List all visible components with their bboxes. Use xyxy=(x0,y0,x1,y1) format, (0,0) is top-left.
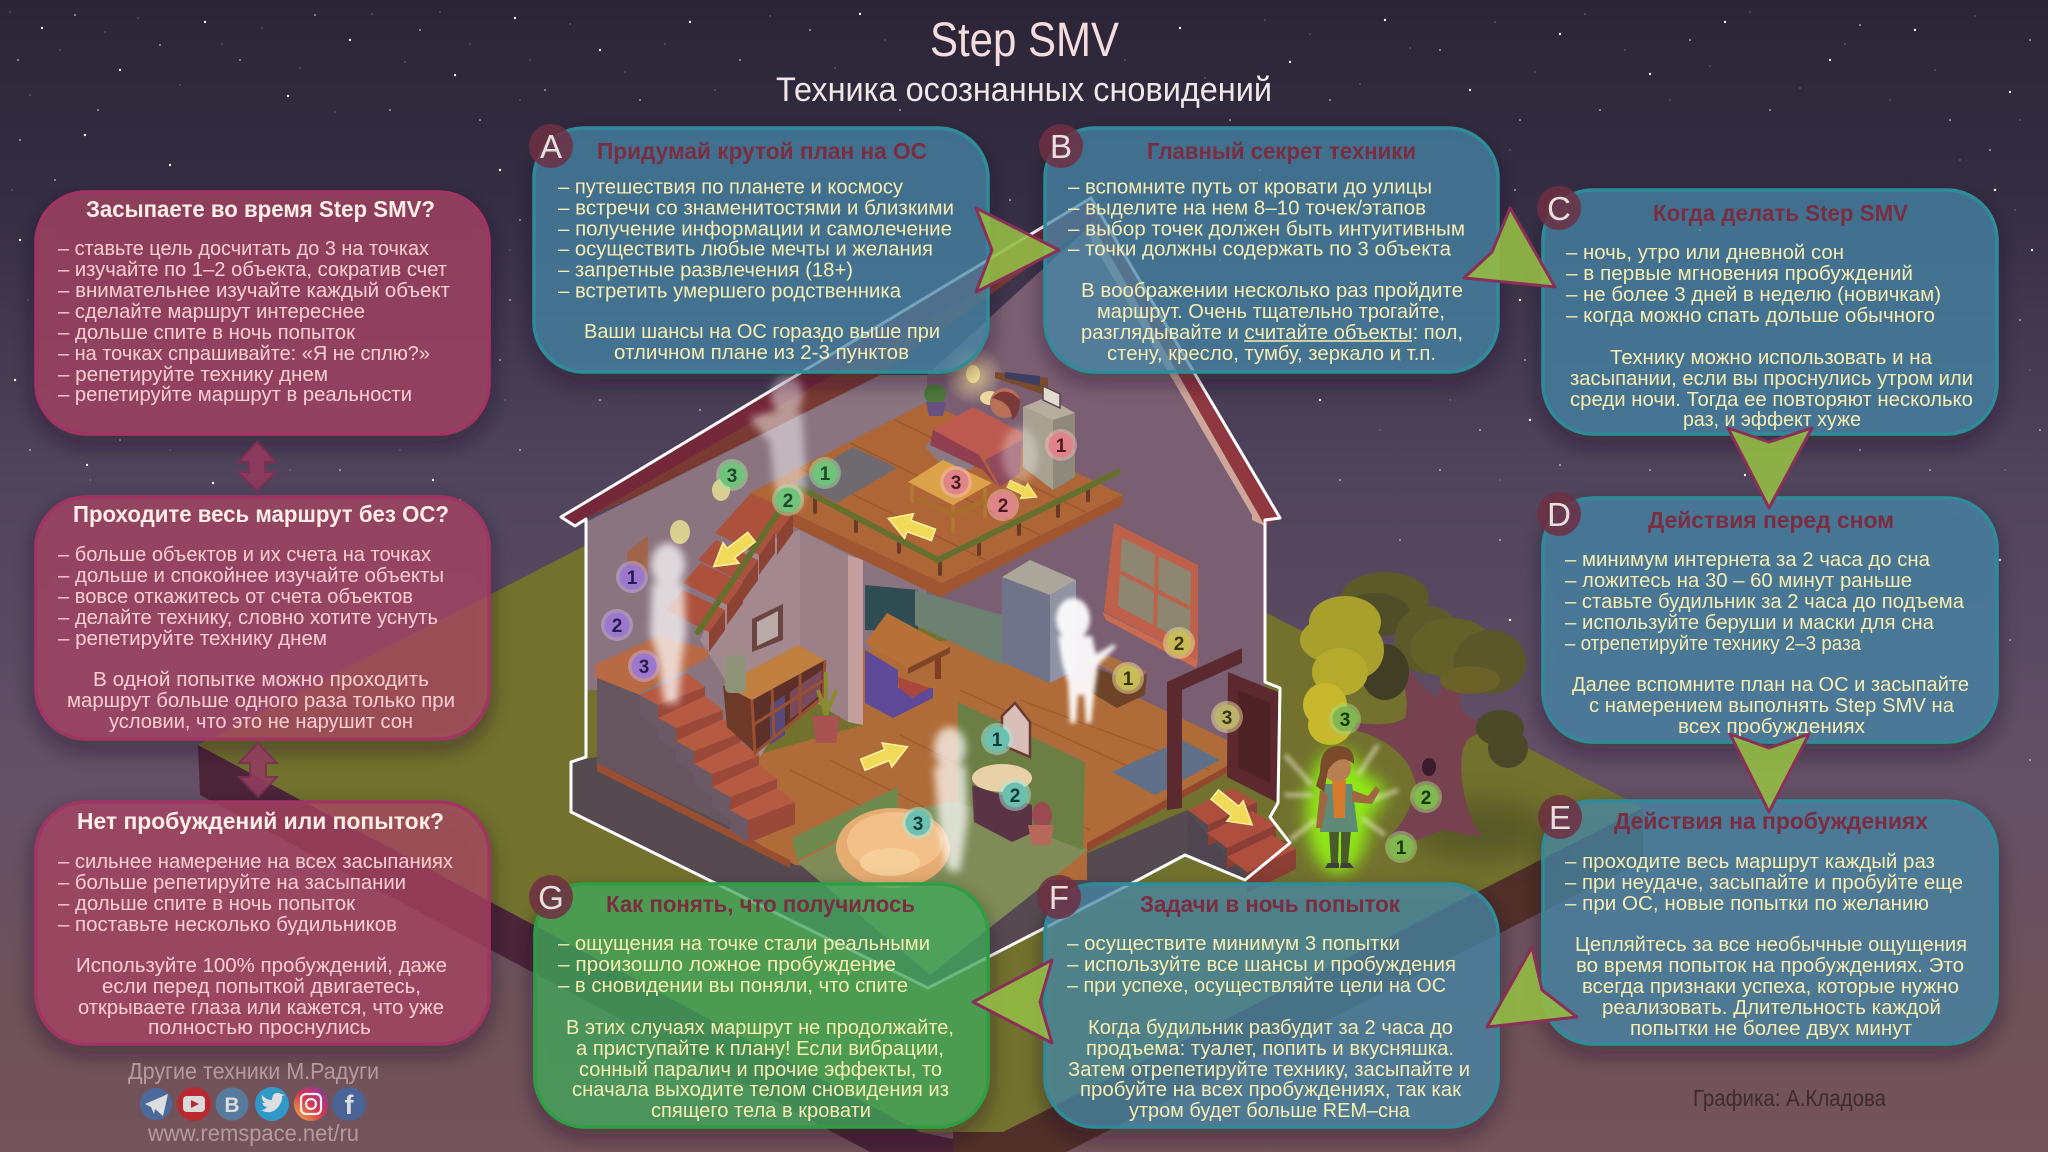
ghost on bed xyxy=(1002,427,1038,483)
right roof xyxy=(1091,198,1280,526)
dark foliage xyxy=(1339,572,1528,768)
badge E xyxy=(1538,795,1582,839)
list: – репетируйте технику днем xyxy=(58,627,327,650)
window xyxy=(1102,523,1198,668)
route points: bedroom (pink) xyxy=(940,429,1077,521)
list: – на точках спрашивайте: «Я не сплю?» xyxy=(58,342,430,365)
jacket xyxy=(1320,784,1358,832)
heading: Действия на пробуждениях xyxy=(1614,808,1928,834)
panel C: when to do xyxy=(1537,186,1997,434)
route points: bedroom (pink): 1 xyxy=(1056,436,1067,457)
list: – не более 3 дней в неделю (новичкам) xyxy=(1566,283,1941,306)
list: – при успехе, осуществляйте цели на ОС xyxy=(1067,974,1446,997)
graphics credit: Графика: А.Кладова xyxy=(1693,1085,1886,1111)
list: – осуществить любые мечты и желания xyxy=(558,238,933,260)
list: – произошло ложное пробуждение xyxy=(558,953,896,976)
note: среди ночи. Тогда ее повторяют несколько xyxy=(1570,388,1973,411)
note xyxy=(1081,279,1463,365)
attic lamp xyxy=(943,345,1003,405)
panel: going through the route without lucid dream xyxy=(36,497,489,739)
panel box xyxy=(534,128,988,372)
list: – больше репетируйте на засыпании xyxy=(58,871,406,894)
panel A: plan xyxy=(529,124,988,372)
route points: stairs (purple): 1 xyxy=(627,568,638,589)
list: – в первые мгновения пробуждений xyxy=(1566,262,1913,285)
list: – в сновидении вы поняли, что спите xyxy=(558,974,908,997)
list: – при неудаче, засыпайте и пробуйте еще xyxy=(1565,871,1963,894)
panel box xyxy=(36,497,489,739)
icon: facebook xyxy=(332,1087,366,1121)
panel box xyxy=(1045,128,1498,372)
hair xyxy=(1316,746,1354,792)
list: – репетируйте маршрут в реальности xyxy=(58,383,412,406)
badge C xyxy=(1537,186,1581,230)
route points: hall (yellow): 1 xyxy=(1123,669,1134,690)
note: В одной попытке можно проходить xyxy=(93,668,429,691)
panel box xyxy=(535,884,988,1127)
pot xyxy=(1028,802,1054,845)
note: если перед попыткой двигаетесь, xyxy=(102,975,421,998)
footer: website: www.remspace.net/ru xyxy=(147,1120,359,1146)
list xyxy=(58,543,444,650)
list: – дольше и спокойнее изучайте объекты xyxy=(58,564,444,587)
tree route points: 2 xyxy=(1421,788,1431,809)
route points: stairs (purple): 3 xyxy=(639,657,649,678)
ghost in kitchen xyxy=(1056,598,1116,723)
list: – используйте все шансы и пробуждения xyxy=(1067,953,1456,976)
left roof xyxy=(561,198,1091,527)
arrow E to F xyxy=(1487,947,1577,1027)
panel G: how to know it worked xyxy=(529,875,988,1127)
badge F xyxy=(1037,875,1081,919)
list: – сильнее намерение на всех засыпаниях xyxy=(58,850,454,873)
ground floor wood xyxy=(752,640,1227,880)
grass top xyxy=(198,403,1643,1132)
tall shelf xyxy=(1023,386,1075,490)
badge B: B xyxy=(1050,128,1072,165)
route points: bathroom (teal): 3 xyxy=(913,814,923,835)
badge G: G xyxy=(538,879,564,916)
list: – ночь, утро или дневной сон xyxy=(1566,241,1844,264)
house base xyxy=(571,757,1290,988)
kitchen table xyxy=(865,613,950,679)
list: – получение информации и самолечение xyxy=(558,218,952,240)
shoe rack xyxy=(1090,655,1147,708)
soil left side xyxy=(198,745,957,1152)
ground island xyxy=(198,403,1643,1152)
hoodie xyxy=(1332,780,1346,818)
glow xyxy=(1306,750,1384,874)
list: – минимум интернета за 2 часа до сна xyxy=(1565,548,1931,571)
bedside table xyxy=(908,460,992,533)
mirror xyxy=(1002,703,1030,757)
tree xyxy=(1300,572,1528,863)
left wall xyxy=(586,375,927,757)
yellow foliage xyxy=(1300,596,1384,745)
sofa xyxy=(865,650,933,718)
heading: Главный секрет техники xyxy=(1147,138,1416,164)
route points: hall (yellow) xyxy=(1112,627,1243,733)
note: засыпании, если вы проснулись утром или xyxy=(1570,367,1973,390)
note: открываете глаза или кажется, что уже xyxy=(78,996,444,1019)
rug xyxy=(1112,740,1220,795)
platform planks xyxy=(800,420,1085,560)
bathroom xyxy=(792,702,1088,975)
note: во время попыток на пробуждениях. Это xyxy=(1576,954,1964,977)
door frame xyxy=(1167,648,1242,810)
note: Далее вспомните план на ОС и засыпайте xyxy=(1572,673,1969,696)
note: продъема: туалет, попить и вкусняшка. xyxy=(1086,1037,1454,1060)
door xyxy=(1227,672,1278,803)
list: – дольше спите в ночь попыток xyxy=(58,892,356,915)
arms xyxy=(1316,786,1380,828)
arrow C to D xyxy=(1728,428,1812,508)
list: – изучайте по 1–2 объекта, сократив счет xyxy=(58,258,448,281)
note xyxy=(1572,673,1969,738)
list: – запретные развлечения (18+) xyxy=(558,258,853,282)
heading: Придумай крутой план на ОС xyxy=(597,138,927,164)
tree route points: 1 xyxy=(1396,838,1407,859)
roof timber line xyxy=(600,240,1060,502)
note: Затем отрепетируйте технику, засыпайте и xyxy=(1068,1058,1470,1081)
note: разглядывайте и считайте объекты: пол, xyxy=(1081,321,1463,344)
panel box xyxy=(1543,801,1997,1044)
heading: Действия перед сном xyxy=(1648,507,1894,533)
under-roof timber band xyxy=(586,225,1091,518)
list: – используйте беруши и маски для сна xyxy=(1565,611,1935,634)
tree route points: 3 xyxy=(1340,710,1350,731)
icon: vk: В xyxy=(224,1094,240,1117)
note xyxy=(1570,346,1973,431)
list: – встречи со знаменитостями и близкими xyxy=(558,196,954,220)
note: спящего тела в кровати xyxy=(651,1099,871,1122)
note: Когда будильник разбудит за 2 часа до xyxy=(1088,1016,1453,1039)
note xyxy=(76,954,447,1039)
list: – ощущения на точке стали реальными xyxy=(558,932,930,955)
note: условии, что это не нарушит сон xyxy=(109,710,413,733)
ghost on upper floor xyxy=(750,375,806,507)
note: стену, кресло, тумбу, зеркало и т.п. xyxy=(1107,342,1436,365)
note: Технику можно использовать и на xyxy=(1610,346,1933,369)
panel E: actions on awakenings xyxy=(1538,795,1997,1044)
note: Используйте 100% пробуждений, даже xyxy=(76,954,447,977)
note: а приступайте к плану! Если вибрации, xyxy=(576,1037,944,1060)
list: – ставьте будильник за 2 часа до подъема xyxy=(1565,590,1965,613)
route points: bedroom (pink): 3 xyxy=(951,473,961,494)
note: раз, и эффект хуже xyxy=(1683,408,1861,431)
note xyxy=(584,320,940,364)
note: пробуйте на всех пробуждениях, так как xyxy=(1080,1078,1462,1101)
note xyxy=(566,1016,954,1122)
heading: Проходите весь маршрут без ОС? xyxy=(73,501,449,527)
route points: bathroom (teal): 2 xyxy=(1010,786,1020,807)
note: полностью проснулись xyxy=(148,1016,371,1039)
right wall xyxy=(927,225,1265,770)
note: В воображении несколько раз пройдите xyxy=(1081,279,1463,302)
route points: hall (yellow): 3 xyxy=(1222,708,1232,729)
list: – ставьте цель досчитать до 3 на точках xyxy=(58,237,430,260)
sink cabinet xyxy=(972,764,1032,842)
arrow D to E xyxy=(1730,734,1809,812)
note: Ваши шансы на ОС гораздо выше при xyxy=(584,320,940,343)
potted plant xyxy=(812,672,840,743)
list: – больше объектов и их счета на точках xyxy=(58,543,432,566)
floor planks xyxy=(790,690,1210,880)
character with green glow xyxy=(1285,745,1398,874)
list: – путешествия по планете и космосу xyxy=(558,176,904,198)
house cutaway illustration xyxy=(561,198,1296,988)
panel B: main secret xyxy=(1039,124,1498,372)
note: маршрут больше одного раза только при xyxy=(67,689,455,712)
arrow B to C xyxy=(1464,208,1555,287)
list xyxy=(58,237,451,406)
yellow route arrows xyxy=(706,476,1260,835)
under-stair wall xyxy=(597,678,752,838)
arrow F to G xyxy=(973,960,1052,1043)
attic rug xyxy=(795,447,897,503)
route points: attic landing (green): 1 xyxy=(820,464,831,485)
tree route points xyxy=(1329,703,1442,863)
list: – встретить умершего родственника xyxy=(558,280,902,302)
list: – сделайте маршрут интереснее xyxy=(58,300,365,323)
trunk xyxy=(1352,668,1484,840)
footer: other techniques: Другие техники М.Радуги xyxy=(128,1058,379,1084)
panel F: tasks on attempt night xyxy=(1037,875,1498,1127)
wall bookshelf xyxy=(995,372,1048,396)
badge B xyxy=(1039,124,1083,168)
house white outline xyxy=(561,198,1290,988)
badge F: F xyxy=(1049,879,1069,916)
head xyxy=(1323,754,1351,782)
badge A: A xyxy=(540,128,562,165)
route points: bathroom (teal): 1 xyxy=(992,730,1003,751)
note: всех пробуждениях xyxy=(1678,715,1866,738)
list: – проходите весь маршрут каждый раз xyxy=(1565,850,1935,873)
note: с намерением выполнять Step SMV на xyxy=(1589,694,1955,717)
wall beside stairs xyxy=(700,530,800,757)
note: Цепляйтесь за все необычные ощущения xyxy=(1575,933,1967,956)
lower stair flight xyxy=(640,673,795,843)
bathtub xyxy=(836,808,950,888)
list xyxy=(1565,850,1963,915)
note: сначала выходите телом сновидения из xyxy=(572,1078,949,1101)
soil right side xyxy=(953,808,1643,1152)
route points: hall (yellow): 2 xyxy=(1174,634,1184,655)
badge G xyxy=(529,875,573,919)
icon: vk xyxy=(216,1088,248,1120)
partition wall xyxy=(800,530,863,725)
small wall picture xyxy=(627,535,648,590)
route points: attic landing (green): 3 xyxy=(727,466,737,487)
tree shadow on grass xyxy=(1410,800,1550,860)
note: отличном плане из 2-3 пунктов xyxy=(614,341,909,364)
attic plant xyxy=(924,384,946,416)
icon: instagram xyxy=(294,1087,328,1121)
list xyxy=(558,176,954,302)
heading: Засыпаете во время Step SMV? xyxy=(86,196,435,222)
heading: Когда делать Step SMV xyxy=(1653,200,1909,226)
panel box xyxy=(1045,884,1498,1127)
note: сонный паралич и прочие эффекты, то xyxy=(579,1058,942,1081)
floor front edge xyxy=(1087,766,1227,852)
list: – вспомните путь от кровати до улицы xyxy=(1068,176,1432,198)
badge D xyxy=(1537,492,1581,536)
badge C: C xyxy=(1547,190,1571,227)
icon: facebook: f xyxy=(344,1090,354,1120)
note: утром будет больше REM–сна xyxy=(1129,1099,1411,1122)
list xyxy=(1565,548,1965,655)
stars xyxy=(10,12,2040,760)
badge A xyxy=(529,124,573,168)
refrigerator xyxy=(1002,560,1076,683)
panel box xyxy=(1543,498,1997,742)
list: – ложитесь на 30 – 60 минут раньше xyxy=(1565,569,1912,592)
note: реализовать. Длительность каждой xyxy=(1602,996,1941,1019)
legs xyxy=(1329,830,1351,864)
stair handrail xyxy=(698,513,778,632)
framed picture xyxy=(752,604,783,652)
arrow between left panels 2 and 3 xyxy=(239,743,277,797)
panel box xyxy=(1543,190,1997,434)
note: В этих случаях маршрут не продолжайте, xyxy=(566,1016,954,1039)
upper floor platform xyxy=(750,402,1123,597)
shoes xyxy=(1325,863,1354,868)
icon: telegram xyxy=(140,1088,172,1120)
subtitle: Техника осознанных сновидений xyxy=(776,71,1272,109)
list: – выбор точек должен быть интуитивным xyxy=(1068,218,1465,240)
heading: Задачи в ночь попыток xyxy=(1140,891,1400,917)
list: – отрепетируйте технику 2–3 раза xyxy=(1565,632,1862,655)
list: – вовсе откажитесь от счета объектов xyxy=(58,585,413,608)
bed xyxy=(925,388,1023,487)
title: Step SMV xyxy=(930,14,1119,67)
ghost on stairs xyxy=(650,543,686,703)
route points: bathroom (teal) xyxy=(902,723,1031,839)
list: – дольше спите в ночь попыток xyxy=(58,321,356,344)
route points: bedroom (pink): 2 xyxy=(998,496,1008,517)
panel box xyxy=(36,192,489,434)
panel: falling asleep during Step SMV xyxy=(36,192,489,434)
list: – поставьте несколько будильников xyxy=(58,913,397,936)
upper stair flight xyxy=(665,493,793,652)
list: – когда можно спать дольше обычного xyxy=(1566,304,1935,327)
badge E: E xyxy=(1549,799,1571,836)
base wood strip xyxy=(597,763,790,868)
note: маршрут. Очень тщательно трогайте, xyxy=(1097,300,1445,323)
door steps xyxy=(1187,788,1296,893)
list xyxy=(1067,932,1456,997)
icon: twitter xyxy=(255,1087,289,1121)
route points: attic landing (green) xyxy=(716,457,841,516)
tree hollow xyxy=(1422,758,1436,776)
bookcase xyxy=(723,645,825,753)
ghost in bathroom xyxy=(934,727,968,871)
route points: stairs (purple) xyxy=(601,561,660,682)
note xyxy=(1068,1016,1470,1122)
note xyxy=(67,668,455,733)
note xyxy=(1575,933,1967,1040)
list: – репетируйте технику днем xyxy=(58,363,328,386)
sparkles xyxy=(1285,745,1398,840)
social icons xyxy=(140,1087,366,1121)
platform railing xyxy=(800,472,1118,574)
kitchen dark cabinets xyxy=(865,585,918,632)
kitchen cabinets xyxy=(915,590,1002,665)
panel: no awakenings or attempts xyxy=(36,802,489,1044)
panel D: actions before sleep xyxy=(1537,492,1997,742)
route points: stairs (purple): 2 xyxy=(612,616,622,637)
list xyxy=(1068,176,1465,260)
arrow between left panels 1 and 2 xyxy=(238,442,276,491)
list: – выделите на нем 8–10 точек/этапов xyxy=(1068,196,1426,220)
note: попытки не более двух минут xyxy=(1630,1017,1913,1040)
list: – при ОС, новые попытки по желанию xyxy=(1565,892,1929,915)
icon: youtube xyxy=(177,1087,211,1121)
arrow A to B xyxy=(976,208,1059,292)
wall lamps xyxy=(670,479,730,544)
stair landing xyxy=(595,635,708,695)
list: – точки должны содержать по 3 объекта xyxy=(1068,238,1452,260)
list: – делайте технику, словно хотите уснуть xyxy=(58,606,438,629)
list xyxy=(558,932,930,997)
route points: attic landing (green): 2 xyxy=(783,491,793,512)
heading: Нет пробуждений или попыток? xyxy=(77,808,444,834)
heading: Как понять, что получилось xyxy=(606,891,915,917)
list: – внимательнее изучайте каждый объект xyxy=(58,279,451,302)
note: всегда признаки успеха, которые нужно xyxy=(1582,975,1959,998)
badge D: D xyxy=(1547,496,1571,533)
list xyxy=(1566,241,1941,327)
list: – осуществите минимум 3 попытки xyxy=(1067,932,1400,955)
panel box xyxy=(36,802,489,1044)
list xyxy=(58,850,454,936)
